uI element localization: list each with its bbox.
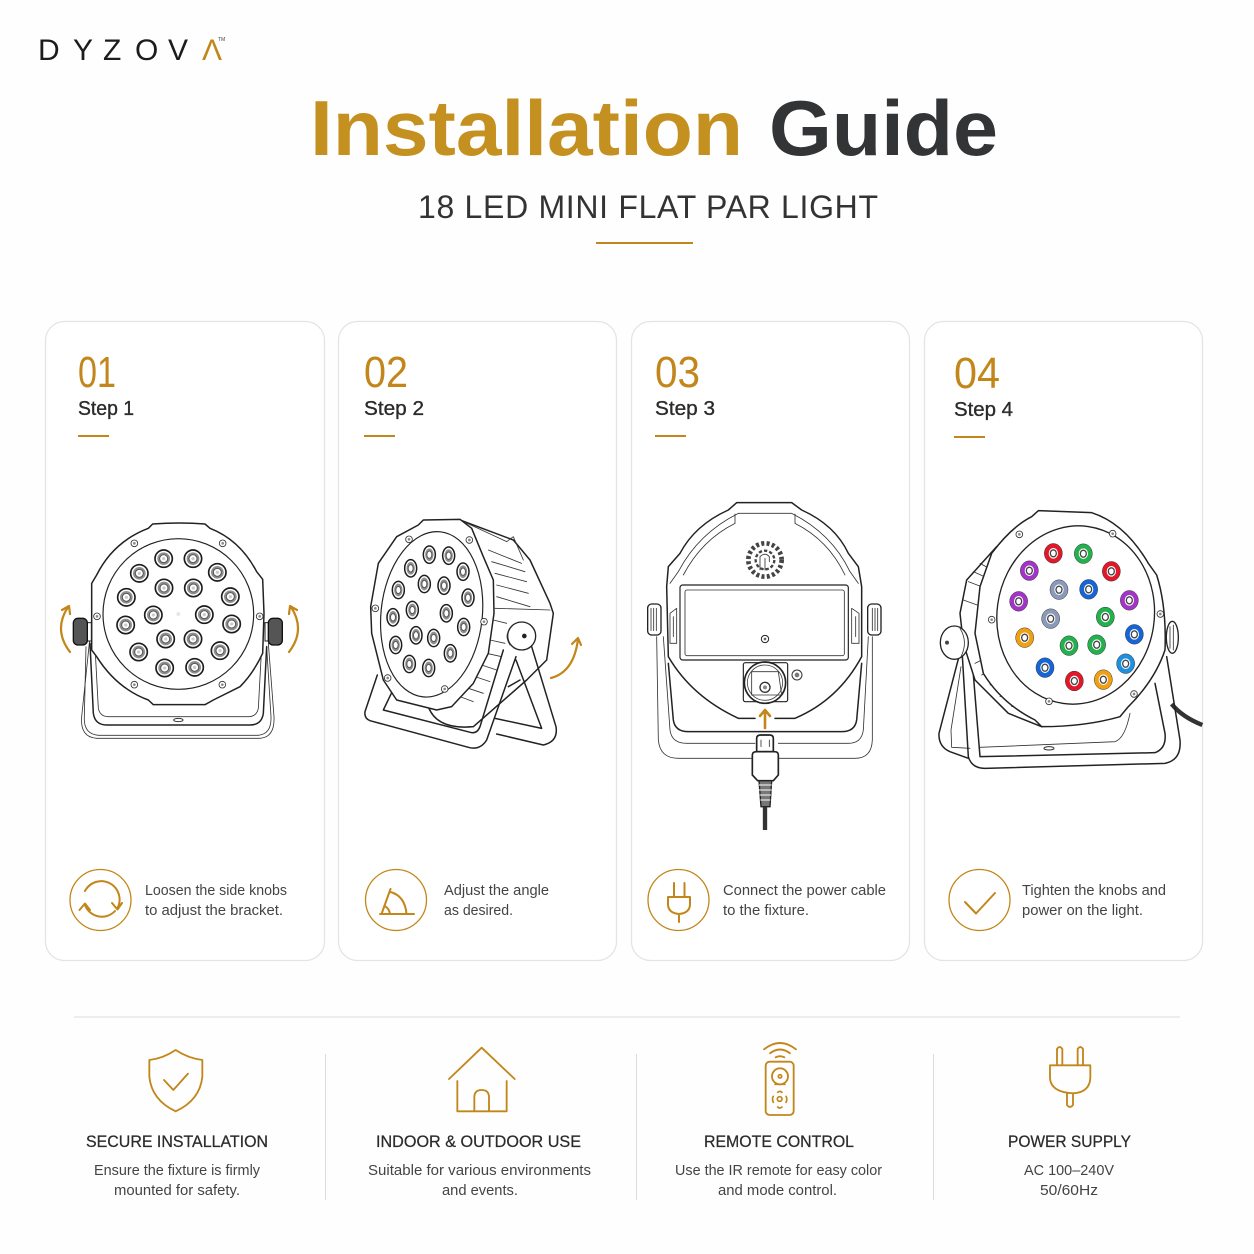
icon: angle [366,870,426,930]
subtitle: 18 LED MINI FLAT PAR LIGHT [418,189,878,225]
feature: indoor and outdoor use: INDOOR & OUTDOOR USE [376,1132,581,1151]
step 2 description: Adjust the angle [444,882,549,899]
step 1 number: 01 [78,348,116,397]
feature: indoor and outdoor use [368,1048,591,1199]
step 3 label: Step 3 [655,398,715,420]
icon: shield [149,1050,202,1111]
step 3 number: 03 [655,348,700,397]
feature: remote control: and mode control. [718,1182,837,1199]
step 2 description [444,882,549,919]
feature: remote control: REMOTE CONTROL [704,1132,854,1151]
illustration: fixture lit with coloured LEDs [939,511,1202,768]
step 1 description: to adjust the bracket. [145,902,283,919]
arrow: right knob rotation [289,606,298,652]
step 3 description: to the fixture. [723,902,809,919]
step 4 description: Tighten the knobs and [1022,882,1166,899]
icon: power plug [1050,1047,1090,1107]
icon: plug [648,870,709,930]
panel: step 2 [338,322,616,960]
step 4 label: Step 4 [954,399,1013,421]
icon: check mark [949,870,1010,930]
step 2 description: as desired. [444,902,513,919]
feature: secure installation [86,1050,268,1199]
title: Installation [310,84,743,172]
step 4 number: 04 [954,349,1000,398]
illustration: fixture angled [365,519,556,748]
step 4 description [1022,882,1166,919]
step 1 description: Loosen the side knobs [145,882,287,899]
step 3 description: Connect the power cable [723,882,886,899]
title [310,84,998,172]
panel: step 4 [924,322,1202,960]
step 1 description [145,882,287,919]
panel: step 1 [46,322,324,960]
feature: secure installation: mounted for safety. [114,1182,240,1199]
feature: remote control [675,1043,882,1199]
illustration: fixture front with knobs [73,523,282,738]
illustration: fixture rear with power cable [648,503,881,830]
feature: indoor and outdoor use: Suitable for various environments [368,1162,591,1179]
icon: rotate arrows [70,870,131,930]
icon: house [449,1048,515,1111]
step 2 number: 02 [364,348,408,397]
logo: TM [218,37,225,43]
arrow: tilt direction [551,638,581,678]
arrow: left knob rotation [61,606,70,652]
feature: power supply [1008,1047,1131,1199]
feature: secure installation: Ensure the fixture is firmly [94,1162,260,1179]
feature: indoor and outdoor use: and events. [442,1182,518,1199]
arrow: insert plug [760,710,770,728]
logo: DYZOV Λ [38,34,222,67]
step 3 description [723,882,886,919]
step 4 description: power on the light. [1022,902,1143,919]
feature: power supply: POWER SUPPLY [1008,1132,1131,1151]
title: Guide [769,84,998,172]
feature: remote control: Use the IR remote for easy color [675,1162,882,1179]
step 1 label: Step 1 [78,398,134,420]
step 2 label: Step 2 [364,398,424,420]
feature: power supply: 50/60Hz [1040,1182,1098,1199]
feature: secure installation: SECURE INSTALLATION [86,1132,268,1151]
panel: step 3 [632,322,910,960]
icon: remote [764,1043,796,1115]
feature: power supply: AC 100–240V [1024,1162,1114,1179]
